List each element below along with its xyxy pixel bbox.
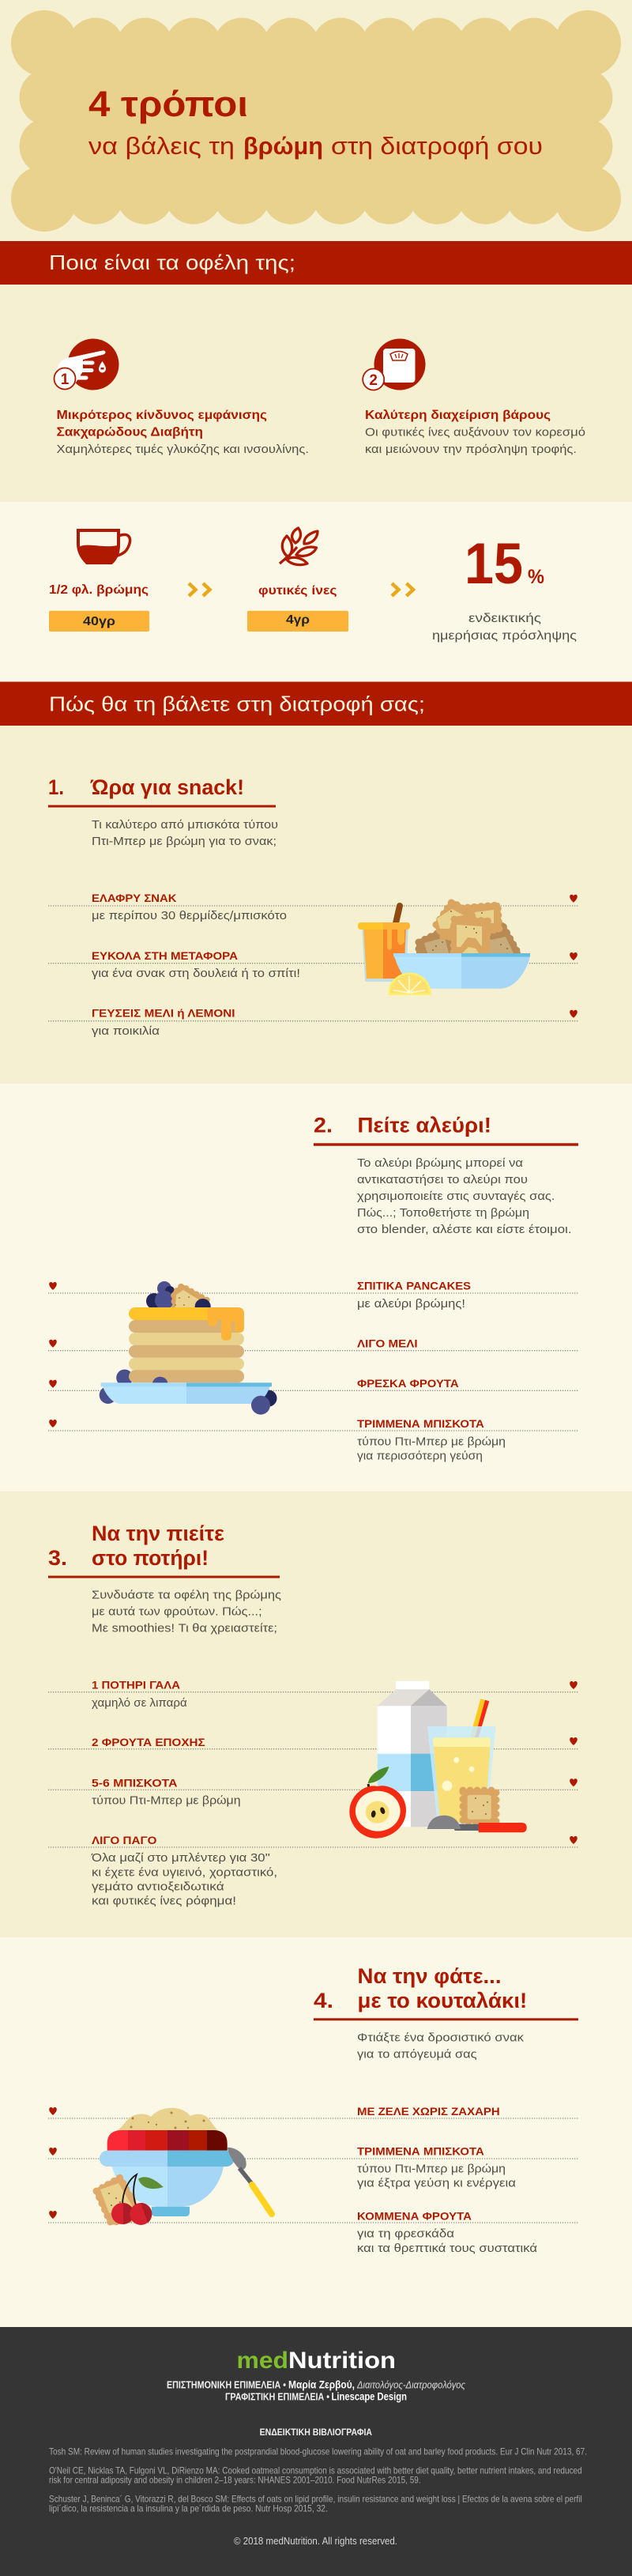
credits: Διαιτολόγος-Διατροφολόγος [356,2380,466,2391]
item: crushed biscuits [48,1417,579,1463]
copyright: © 2018 medNutrition. All rights reserved. [234,2536,397,2547]
item: some ice: Όλα μαζί στο μπλέντερ για 30'' [91,1852,270,1865]
icon: cup of oats [78,530,130,563]
bowl [393,953,530,989]
smoothie glass [427,1726,496,1826]
intro text 2: αντικαταστήσει το αλεύρι που [357,1174,528,1186]
heading 3 [48,1522,280,1578]
intro text 1 [92,819,278,848]
subtitle [88,132,543,160]
item: seasonal fruit: 2 ΦΡΟΥΤΑ ΕΠΟΧΗΣ [92,1736,205,1748]
heading bar: benefits [0,241,632,285]
label: plant fibres: φυτικές ίνες [258,584,337,598]
benefit 2 text: Οι φυτικές ίνες αυξάνουν τον κορεσμό [365,425,585,439]
pill: 40 g: 40γρ [83,615,115,628]
item: chopped fruit: ΚΟΜΜΕΝΑ ΦΡΟΥΤΑ [357,2209,472,2222]
item: crushed biscuits: ΤΡΙΜΜΕΝΑ ΜΠΙΣΚΟΤΑ [357,2145,484,2158]
heading 2: Πείτε αλεύρι! [357,1114,491,1137]
blueberries and biscuit on top [146,1281,211,1314]
straw [470,1699,489,1737]
lower blueberries behind stack [116,1369,133,1386]
item: honey or lemon: για ποικιλία [92,1025,160,1038]
item: fresh fruit: ΦΡΕΣΚΑ ΦΡΟΥΤΑ [357,1377,459,1390]
item: some ice: και φυτικές ίνες ρόφημα! [92,1895,236,1908]
benefit 2 text: Καλύτερη διαχείριση βάρους [365,409,551,422]
item: chopped fruit [48,2209,579,2255]
logo [237,2348,396,2374]
references: lipi´dico, la resistencia a la insulina y la pe´rdida de peso. Nutr Hosp 2015, 32. [49,2502,328,2514]
back biscuit right [468,905,499,933]
syrup [129,1307,244,1341]
caption: daily intake [432,612,577,643]
caption: daily intake: ημερήσιας πρόσληψης [432,629,577,643]
pancake layers [129,1320,244,1382]
item: biscuits [48,1776,579,1807]
pill: 4 g [247,611,348,632]
intro text 4: για το απόγευμά σας [357,2049,477,2061]
item: light snack [48,892,579,922]
intro text 4: Φτιάξτε ένα δροσιστικό σνακ [357,2032,525,2045]
benefit 2 [363,338,585,456]
intro text 1: Τι καλύτερο από μπισκότα τύπου [92,819,278,832]
subtitle: βρώμη [243,132,323,160]
biscuit [96,2178,138,2223]
panel: way 3 smoothie [48,1522,579,1908]
item: fresh fruit [48,1377,579,1390]
bowl [100,2151,235,2216]
credits: ΓΡΑΦΙΣΤΙΚΗ ΕΠΙΜΕΛΕΙΑ • [225,2392,329,2403]
intro text 3: Με smoothies! Τι θα χρειαστείτε; [92,1622,277,1635]
dark biscuit left [419,929,452,953]
item: a little honey [48,1337,579,1351]
item: easy to carry: ΕΥΚΟΛΑ ΣΤΗ ΜΕΤΑΦΟΡΑ [92,949,238,962]
caption: daily intake: ενδεικτικής [468,612,541,625]
references: risk for central adiposity and obesity in children 2–18 years: NHANES 2001–2010. Food NutrRes 2015, 59. [49,2474,421,2485]
item: crushed biscuits: τύπου Πτι-Μπερ με βρώμη [357,1435,506,1448]
credits: Linescape Design [332,2390,407,2403]
intro text 3: με αυτά των φρούτων. Πώς...; [92,1606,262,1619]
item: chopped fruit: για τη φρεσκάδα [357,2228,454,2241]
credits: ΕΠΙΣΤΗΜΟΝΙΚΗ ΕΠΙΜΕΛΕΙΑ • [167,2380,286,2391]
item: sugar-free jelly: ΜΕ ΖΕΛΕ ΧΩΡΙΣ ΖΑΧΑΡΗ [357,2105,500,2118]
item: honey or lemon: ΓΕΥΣΕΙΣ ΜΕΛΙ ή ΛΕΜΟΝΙ [92,1007,235,1020]
label: half cup of oats: 1/2 φλ. βρώμης [49,583,149,597]
benefit 1 text [57,409,309,456]
benefit 2 text [365,409,585,456]
panel: fibre stats [49,528,577,643]
header biscuit with title [11,10,621,232]
big number: 15 percent: 15 [465,532,523,596]
arrows: second chevrons [392,583,413,596]
item: easy to carry: για ένα σνακ στη δουλειά ή το σπίτι! [92,967,300,980]
biscuit [463,1790,496,1822]
illustration: juice, bowl of biscuits, lemon [358,902,530,994]
item: crushed biscuits [48,2145,579,2190]
panel: way 2 flour [48,1114,579,1463]
heading 1: Ώρα για snack! [90,775,244,799]
item: glass of milk [48,1679,579,1710]
straw [396,906,400,923]
item: some ice [48,1834,579,1908]
jelly layer [107,2130,228,2151]
intro text 2: χρησιμοποιείτε στις συνταγές σας. [357,1190,555,1203]
subtitle: στη διατροφή σου [331,132,543,160]
intro text 2: Πώς...; Τοποθετήστε τη βρώμη [357,1207,529,1220]
oat mound [116,2108,219,2131]
back biscuit left [436,902,472,937]
item: sugar-free jelly [48,2105,579,2118]
item: some ice: ΛΙΓΟ ΠΑΓΟ [92,1834,157,1846]
dark biscuit right [491,925,518,953]
intro text 1: Πτι-Μπερ με βρώμη για το σνακ; [92,835,276,848]
heading 3: στο ποτήρι! [92,1546,209,1570]
pill: 40 g [49,611,149,632]
plate [100,1377,276,1415]
item: home pancakes [48,1280,579,1311]
item: light snack: ΕΛΑΦΡΥ ΣΝΑΚ [92,892,177,904]
panel: way 4 spoon [48,1964,579,2255]
item: crushed biscuits: για περισσότερη γεύση [357,1450,483,1463]
heading bar: benefits: Ποια είναι τα οφέλη της; [49,251,295,274]
front biscuit [453,919,488,953]
intro text 4 [357,2032,525,2061]
item: light snack: με περίπου 30 θερμίδες/μπισκότο [92,910,287,922]
heading 4: με το κουταλάκι! [357,1989,527,2012]
heading bar: how to: Πώς θα τη βάλετε στη διατροφή σας; [49,692,425,716]
references [49,2446,587,2514]
item: glass of milk: 1 ΠΟΤΗΡΙ ΓΑΛΑ [92,1679,180,1692]
heading 3: Να την πιείτε [92,1522,224,1545]
biscuits [419,902,518,953]
biscuit background shape [11,10,621,232]
item: a little honey: ΛΙΓΟ ΜΕΛΙ [357,1337,418,1349]
credits [167,2378,466,2403]
heading 4 [314,1964,578,2020]
heading 3: 3. [48,1546,67,1570]
spoon and base [427,1816,527,1832]
intro text 2: στο blender, αλέστε και είστε έτοιμοι. [357,1224,572,1236]
illustration: milk, smoothie, apple [349,1681,527,1839]
item: easy to carry [48,949,579,980]
item: biscuits: τύπου Πτι-Μπερ με βρώμη [92,1794,241,1807]
cherries [111,2174,164,2225]
cup [358,922,410,982]
item: crushed biscuits: τύπου Πτι-Μπερ με βρώμη [357,2163,506,2175]
benefit 1 text: Σακχαρώδους Διαβήτη [57,425,203,439]
footer [0,2327,632,2576]
benefit 1 [54,338,309,456]
title: 4 τρόποι [88,84,248,124]
heading 2 [314,1114,578,1146]
milk carton [378,1681,447,1827]
credits: Μαρία Ζερβού, [288,2378,355,2391]
item: seasonal fruit [48,1736,579,1749]
item: some ice: γεμάτο αντιοξειδωτικά [92,1881,224,1894]
item: home pancakes: με αλεύρι βρώμης! [357,1298,465,1311]
spoon [228,2148,272,2214]
icon: hand with blood drop [54,338,118,390]
panel: way 1 snack [48,775,579,1038]
icon: hand with blood drop: 1 [61,372,70,388]
logo: Nutrition [288,2348,396,2374]
heading 1 [48,775,276,808]
item: crushed biscuits: ΤΡΙΜΜΕΝΑ ΜΠΙΣΚΟΤΑ [357,1417,484,1430]
illustration: pancake stack [100,1281,276,1415]
item: home pancakes: ΣΠΙΤΙΚΑ PANCAKES [357,1280,471,1292]
item: some ice: κι έχετε ένα υγιεινό, χορταστικό, [92,1867,277,1880]
item: glass of milk: χαμηλό σε λιπαρά [92,1697,187,1710]
heading 2: 2. [314,1114,333,1137]
intro text 3: Συνδυάστε τα οφέλη της βρώμης [92,1589,281,1601]
arrows: first chevrons [189,583,210,596]
big number: 15 percent: % [528,566,544,588]
heading 4: 4. [314,1989,333,2012]
illustration: yoghurt bowl with oats, jelly, spoon and cherries [96,2108,272,2225]
heading bar: how to [0,681,632,726]
icon: weighing scale: 2 [369,372,378,389]
benefit 1 text: Μικρότερος κίνδυνος εμφάνισης [57,409,267,422]
bibliography heading: ΕΝΔΕΙΚΤΙΚΗ ΒΙΒΛΙΟΓΡΑΦΙΑ [260,2427,372,2438]
lemon slice [389,974,430,994]
benefit 2 text: και μειώνουν την πρόσληψη τροφής. [365,443,577,456]
subtitle: να βάλεις τη [88,132,235,160]
item: crushed biscuits: για έξτρα γεύση κι ενέργεια [357,2178,516,2190]
item: chopped fruit: και τα θρεπτικά τους συστατικά [357,2242,537,2255]
item: honey or lemon [48,1007,579,1038]
heading 1: 1. [48,775,64,799]
heading 4: Να την φάτε... [357,1964,501,1988]
benefit 1 text: Χαμηλότερες τιμές γλυκόζης και ινσουλίνης. [57,443,309,456]
icon: wheat [280,528,318,565]
intro text 2 [357,1157,572,1236]
intro text 2: Το αλεύρι βρώμης μπορεί να [357,1157,523,1170]
apple [349,1767,406,1839]
intro text 3 [92,1589,281,1635]
item: biscuits: 5-6 ΜΠΙΣΚΟΤΑ [92,1776,177,1789]
pill: 4 g: 4γρ [286,613,310,627]
icon: weighing scale [363,338,425,390]
logo: med [237,2348,288,2374]
